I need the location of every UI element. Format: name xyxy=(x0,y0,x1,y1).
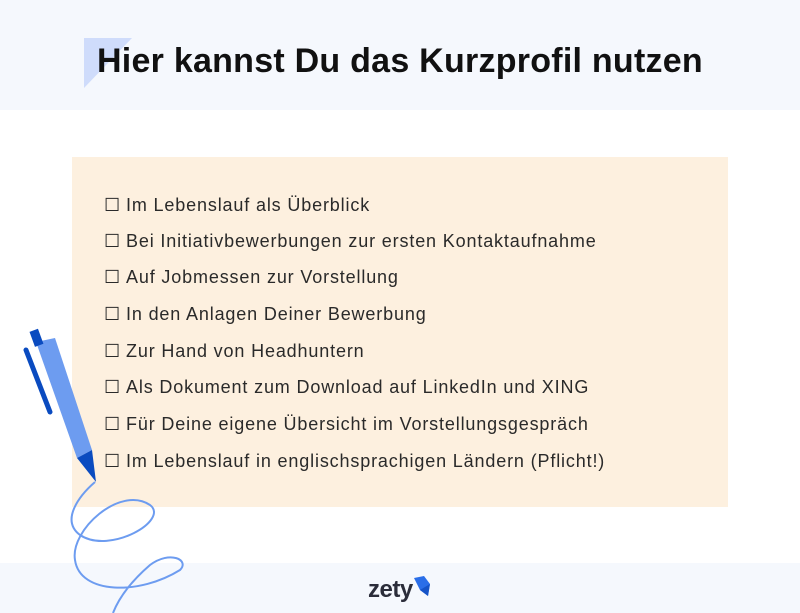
title accent triangle xyxy=(84,38,132,88)
item 6: ☐ xyxy=(104,377,120,397)
item 3: Auf Jobmessen zur Vorstellung xyxy=(126,267,399,287)
top band xyxy=(0,0,800,110)
item 7: ☐ xyxy=(104,414,120,434)
item 4: In den Anlagen Deiner Bewerbung xyxy=(126,304,427,324)
icon: pen with ink loop xyxy=(24,328,184,613)
bottom band xyxy=(0,563,800,613)
item 7: Für Deine eigene Übersicht im Vorstellungsgespräch xyxy=(126,414,589,434)
item 6: Als Dokument zum Download auf LinkedIn und XING xyxy=(126,377,589,397)
item 1: ☐ xyxy=(104,195,120,215)
logo: zety: zety xyxy=(368,576,413,603)
item 2: ☐ xyxy=(104,231,120,251)
panel: checklist xyxy=(72,157,728,507)
title: Hier kannst Du das Kurzprofil nutzen xyxy=(97,42,703,80)
item 5: ☐ xyxy=(104,341,120,361)
item 8: Im Lebenslauf in englischsprachigen Ländern (Pflicht!) xyxy=(126,451,605,471)
item 3: ☐ xyxy=(104,267,120,287)
item 8: ☐ xyxy=(104,451,120,471)
item 4: ☐ xyxy=(104,304,120,324)
item 1: Im Lebenslauf als Überblick xyxy=(126,195,370,215)
item 5: Zur Hand von Headhuntern xyxy=(126,341,365,361)
item 2: Bei Initiativbewerbungen zur ersten Kontaktaufnahme xyxy=(126,231,597,251)
